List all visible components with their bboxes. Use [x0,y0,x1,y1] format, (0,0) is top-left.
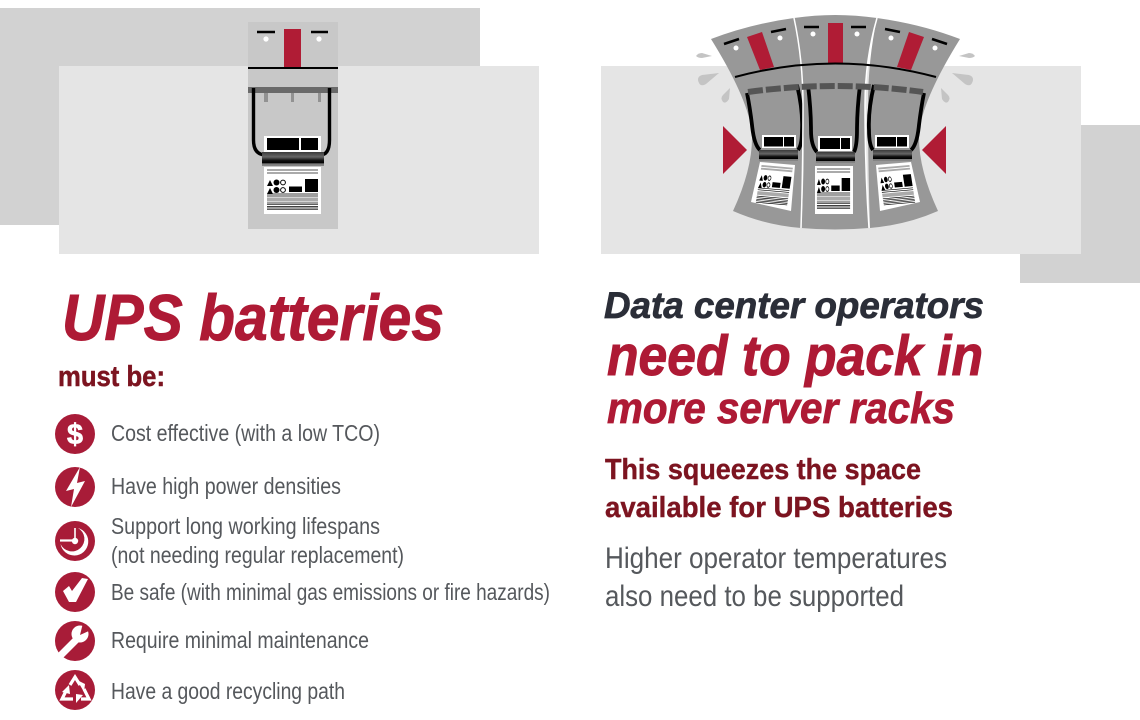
item: lifespan: (not needing regular replacement) [111,542,404,568]
arrow: squeeze from right [922,126,946,174]
list of requirements [55,414,550,710]
icon: lightning bolt [55,467,95,507]
icon: dollar [55,414,95,454]
heading: UPS batteries: UPS batteries [62,281,444,354]
text block: temperatures: Higher operator temperatures [605,542,947,575]
heading: data center operators: Data center operators [604,285,984,326]
icon: recycling [55,670,95,710]
battery: right [868,18,960,228]
text block: temperatures: also need to be supported [605,580,904,613]
item: lifespan [111,513,404,568]
background panel right [601,66,1140,283]
item: cost: Cost effective (with a low TCO) [111,420,380,446]
icon: wrench [55,621,95,661]
icon: squeezed UPS batteries [696,15,975,230]
icon: check mark [55,572,95,612]
arrow: squeeze from left [723,126,747,174]
item: maintenance: Require minimal maintenance [111,627,369,653]
battery: left [711,18,803,228]
subheading: must be: must be: [58,361,165,393]
item: lifespan: Support long working lifespans [111,513,380,539]
background panel left [0,8,539,254]
icon: clock [55,521,95,561]
text block: squeeze: available for UPS batteries [605,492,953,524]
icon: dollar: $ [67,419,83,451]
heading: more server racks: more server racks [607,384,955,433]
text block: temperatures [605,542,947,613]
pressure marks [696,53,975,103]
item: power: Have high power densities [111,473,341,499]
icon: single UPS battery [248,22,338,229]
heading: need to pack in: need to pack in [607,324,983,388]
item: safe: Be safe (with minimal gas emissions or fire hazards) [111,579,550,605]
item: recycling: Have a good recycling path [111,678,345,704]
battery: centre [794,15,877,230]
text block: squeeze: This squeezes the space [605,454,921,486]
text block: squeeze [605,454,953,524]
